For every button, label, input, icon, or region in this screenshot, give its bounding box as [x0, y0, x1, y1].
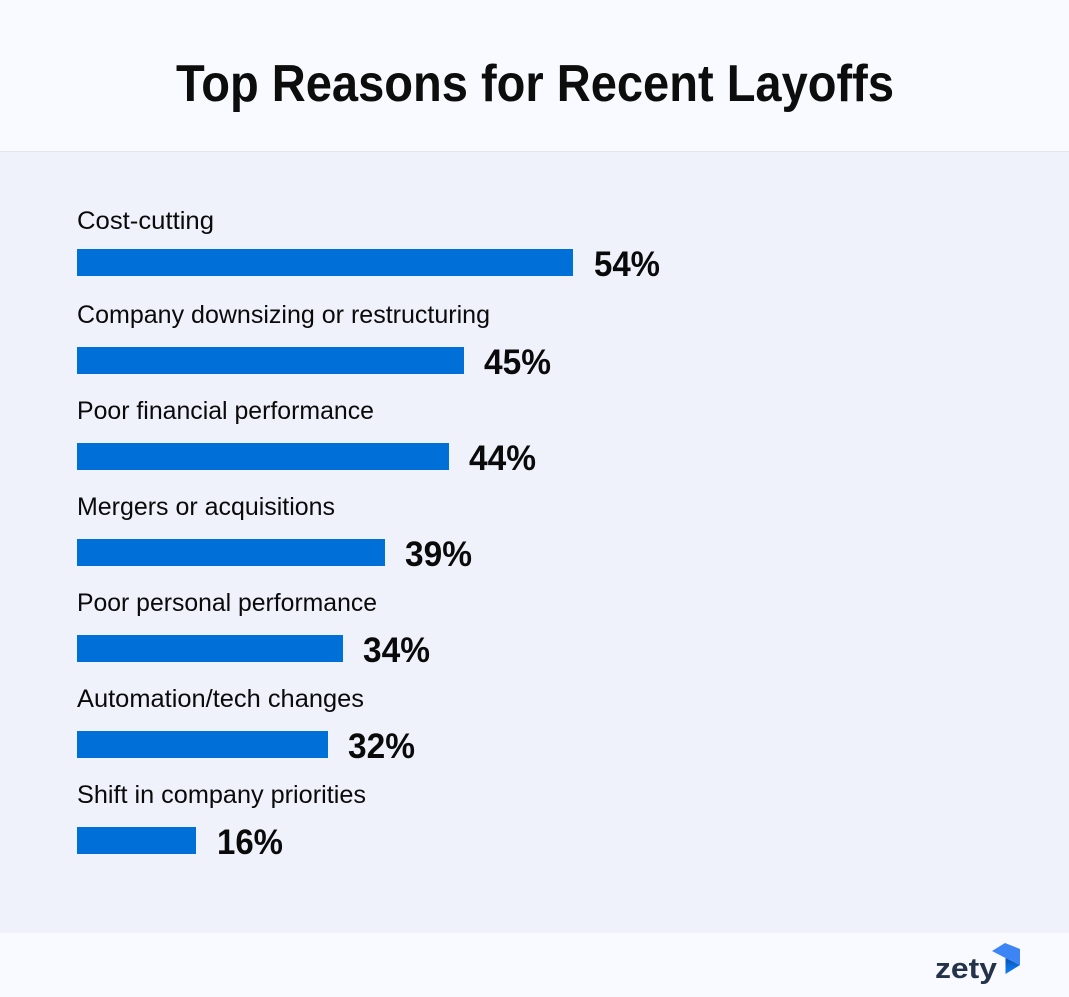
row: automation/tech changes: [77, 685, 415, 766]
icon: zety cube: [992, 943, 1020, 974]
row: automation/tech changes: 32%: [348, 727, 415, 766]
row: cost-cutting: Cost-cutting: [77, 207, 214, 235]
row: company downsizing or restructuring: Company downsizing or restructuring: [77, 301, 490, 329]
row: poor personal performance: 34%: [363, 631, 430, 670]
row: mergers or acquisitions: Mergers or acquisitions: [77, 493, 335, 521]
row: cost-cutting: 54%: [594, 245, 660, 284]
row: poor personal performance: Poor personal performance: [77, 589, 377, 617]
row: company downsizing or restructuring: [77, 301, 551, 382]
panel: header: [0, 0, 1069, 152]
logo: zety: zety: [935, 953, 997, 985]
row: shift in company priorities: 16%: [217, 823, 283, 862]
row: poor financial performance: [77, 397, 536, 478]
row: cost-cutting: [77, 207, 660, 284]
row: shift in company priorities: Shift in company priorities: [77, 781, 366, 809]
row: poor financial performance: Poor financial performance: [77, 397, 374, 425]
logo: zety: [935, 943, 1020, 985]
panel: chart: [0, 151, 1069, 933]
row: poor personal performance: [77, 589, 430, 670]
row: company downsizing or restructuring: 45%: [484, 343, 551, 382]
row: mergers or acquisitions: [77, 493, 472, 574]
row: poor financial performance: 44%: [469, 439, 536, 478]
row: automation/tech changes: Automation/tech changes: [77, 685, 364, 713]
row: shift in company priorities: [77, 781, 366, 862]
row: mergers or acquisitions: 39%: [405, 535, 472, 574]
title: Top Reasons for Recent Layoffs: [176, 55, 894, 113]
